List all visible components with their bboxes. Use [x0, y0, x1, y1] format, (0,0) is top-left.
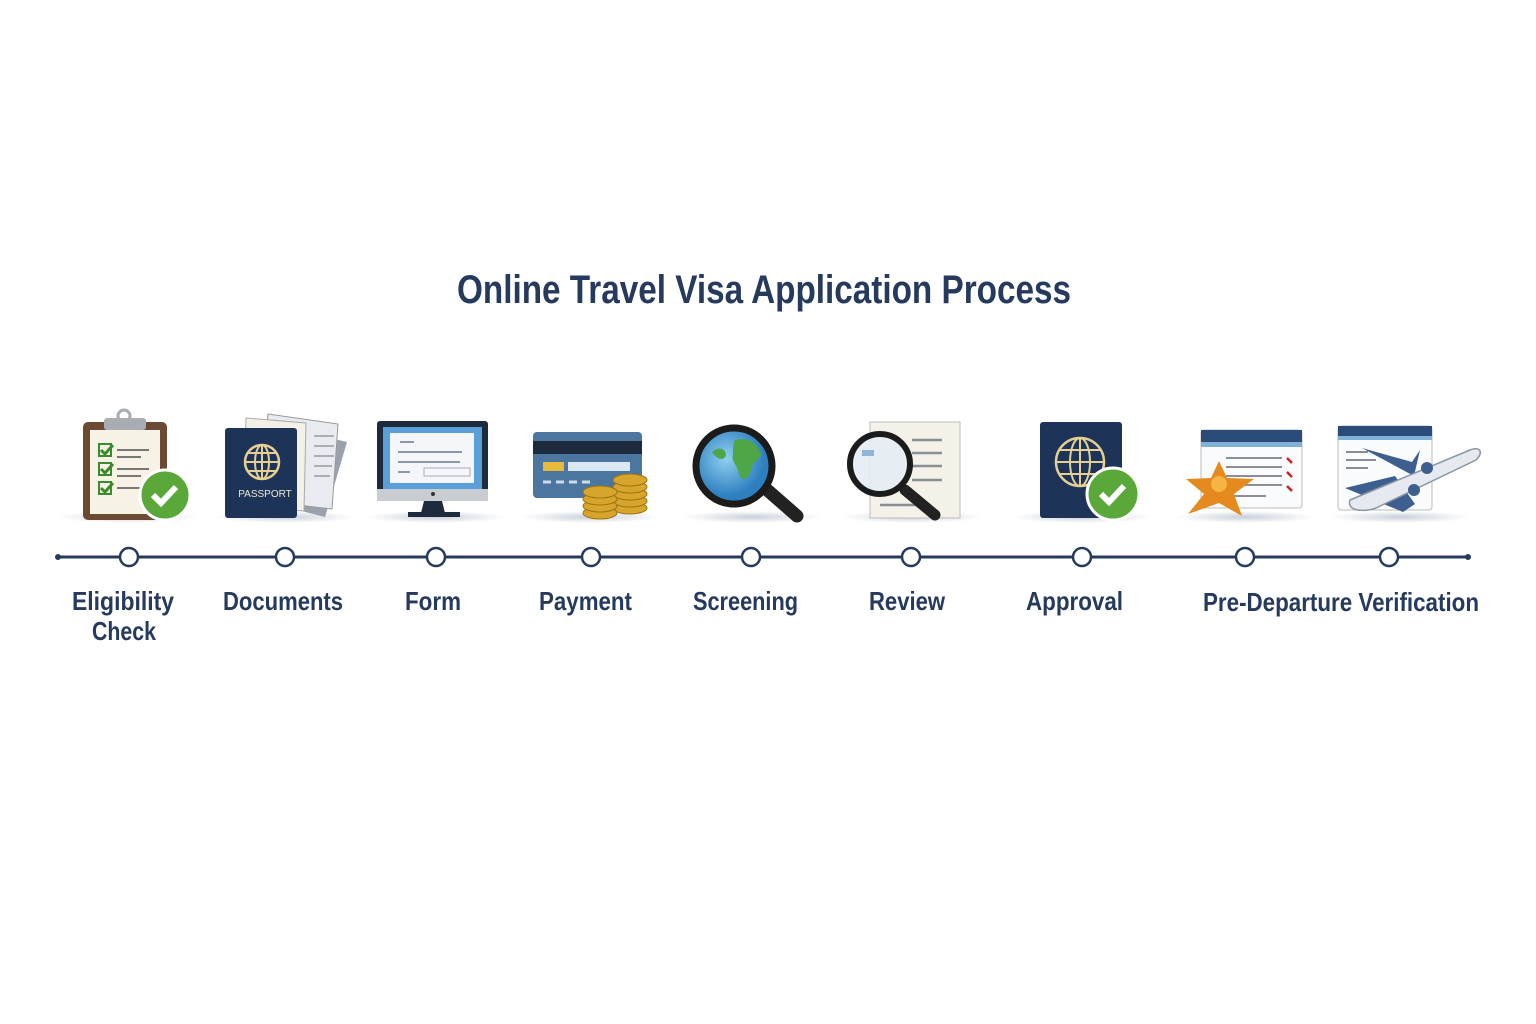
icon: passport with documents: PASSPORT — [238, 489, 292, 500]
icon: computer monitor form — [366, 421, 506, 523]
icon: clipboard checklist — [58, 410, 198, 523]
step labels: Review — [869, 586, 946, 616]
step labels: Form — [405, 586, 461, 616]
icon: passport with documents — [215, 414, 355, 523]
icon: magnifier globe — [682, 428, 822, 523]
step labels: Payment — [539, 586, 632, 616]
step labels: Documents — [223, 586, 343, 616]
icon: credit card and coins — [520, 432, 660, 523]
step labels: Approval — [1026, 586, 1123, 616]
step labels: Eligibility — [72, 586, 174, 616]
step labels — [72, 586, 1479, 646]
step labels: Check — [92, 616, 156, 646]
title: Online Travel Visa Application Process — [457, 268, 1071, 312]
icon: airplane with document — [1330, 426, 1480, 523]
icon: magnifier over document — [842, 422, 982, 523]
timeline — [55, 548, 1471, 566]
icon: approved passport — [1012, 422, 1152, 523]
step labels: Pre-Departure Verification — [1203, 587, 1479, 617]
icon: itinerary with star — [1175, 430, 1315, 523]
step labels: Screening — [693, 586, 798, 616]
